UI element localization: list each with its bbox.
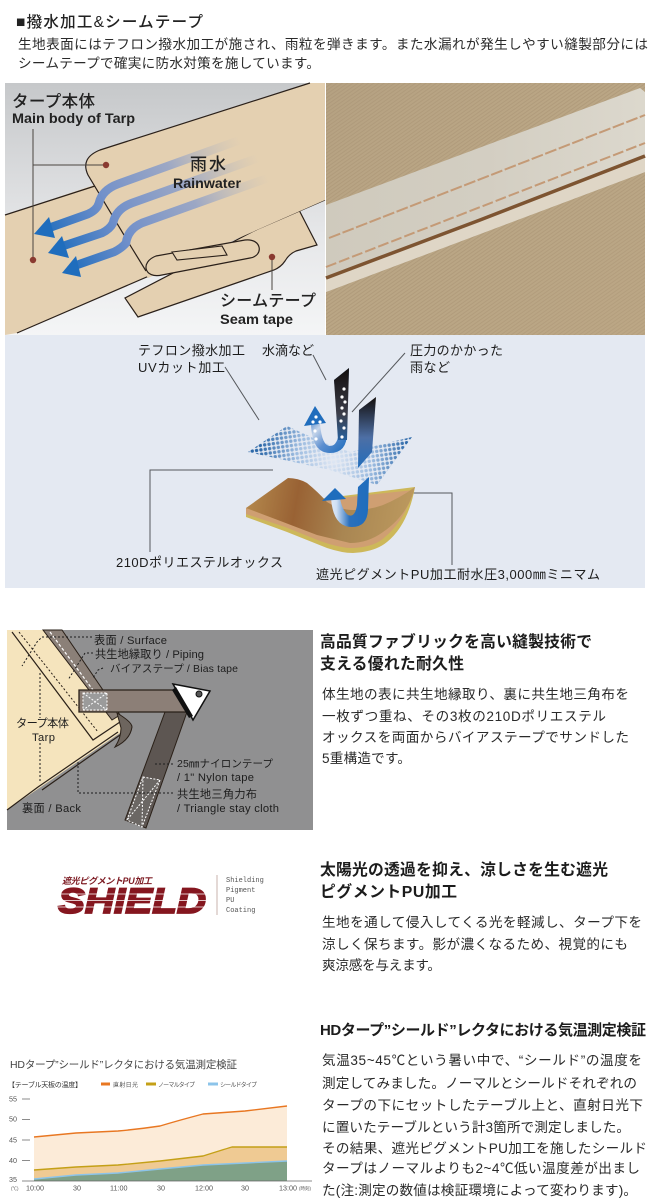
heading: shield pigment: ピグメントPU加工: [320, 882, 457, 901]
text: shield pigment: 涼しく保ちます。影が濃くなるため、視覚的にも: [322, 937, 628, 952]
logo: SHIELD: Shielding: [226, 877, 264, 885]
panel: stitching structure diagram: 共生地縁取り / Piping: [95, 647, 204, 661]
panel: tarp diagram: 雨水: [190, 155, 226, 174]
leader lines: [150, 353, 452, 565]
text: measurement: タープの下にセットしたテーブル上と、直射日光下: [322, 1097, 643, 1113]
panel: fabric layer diagram: 遮光ピグメントPU加工耐水圧3,000㎜ミニマム: [316, 567, 600, 582]
sewn tape band: [326, 88, 645, 292]
intro text: 生地表面にはテフロン撥水加工が施され、雨粒を弾きます。また水漏れが発生しやすい縫製部分には: [18, 37, 648, 52]
text: shield pigment: 爽涼感を与えます。: [322, 957, 441, 973]
chart: temperature measurement: 13:00: [279, 1184, 297, 1192]
chart: temperature measurement: (時刻): [299, 1185, 311, 1192]
text: measurement: 気温35~45℃という暑い中で、“シールド”の温度を: [322, 1053, 642, 1068]
panel: fabric layer diagram: UVカット加工: [138, 360, 225, 375]
panel: stitching structure diagram: タープ本体: [16, 716, 69, 730]
panel: stitching structure diagram: 裏面 / Back: [22, 802, 81, 815]
plot areas: [34, 1106, 287, 1181]
text: measurement: た(注:測定の数値は検証環境によって変わります)。: [322, 1183, 637, 1198]
chart title: HDタープ”シールド”レクタにおける気温測定検証: [10, 1058, 238, 1071]
chart: temperature measurement: 30: [157, 1184, 165, 1192]
text: measurement: その結果、遮光ピグメントPU加工を施したシールド: [322, 1141, 647, 1156]
panel: stitching structure diagram: バイアステープ / Bias tape: [110, 663, 238, 675]
chart: temperature measurement: 35: [9, 1175, 17, 1184]
logo: SHIELD: Pigment: [226, 887, 255, 895]
intro text: シームテープで確実に防水対策を施しています。: [18, 55, 320, 71]
heading: shield pigment: 太陽光の透過を抑え、涼しさを生む遮光: [320, 861, 608, 879]
chart: temperature measurement: 12:00: [195, 1184, 213, 1192]
chart: temperature measurement: 45: [9, 1136, 17, 1144]
droplet arrow: [311, 368, 349, 453]
panel: stitching structure diagram: / 1" Nylon tape: [177, 772, 254, 784]
repellent mesh: [248, 426, 412, 485]
text: durability: 一枚ずつ重ね、その3枚の210Dポリエステル: [322, 709, 606, 724]
labels: テフロン撥水加工: [138, 343, 245, 358]
text: measurement: に置いたテーブルという計3箇所で測定しました。: [322, 1119, 630, 1135]
tarp body: [5, 183, 325, 335]
labels: 表面 / Surface: [94, 634, 167, 647]
text: measurement: 測定してみました。ノーマルとシールドそれぞれの: [322, 1076, 637, 1091]
text: durability: [322, 687, 629, 766]
heading: durability: 高品質ファブリックを高い縫製技術で: [320, 632, 592, 651]
heading: shield pigment: [320, 861, 608, 901]
piping: [43, 630, 120, 720]
panel: stitching structure diagram: 25㎜ナイロンテープ: [177, 758, 274, 770]
slot: [146, 240, 259, 276]
legend: シールドタイプ: [220, 1081, 257, 1089]
heading: measurement: HDタープ”シールド”レクタにおける気温測定検証: [320, 1021, 646, 1039]
triangle stay: [173, 684, 210, 720]
panel: tarp diagram: [5, 83, 325, 335]
chart: temperature measurement: 50: [9, 1114, 17, 1124]
text: shield pigment: 生地を通して侵入してくる光を軽減し、タープ下を: [322, 914, 642, 930]
heading: durability: [320, 632, 592, 673]
cream tarp: [7, 630, 122, 810]
logo: SHIELD: 遮光ピグメントPU加工: [62, 876, 153, 886]
panel: stitching structure diagram: 共生地三角力布: [177, 787, 257, 801]
logo: SHIELD: PU: [226, 897, 234, 905]
text: measurement: [322, 1053, 647, 1198]
text: durability: 体生地の表に共生地縁取り、裏に共生地三角布を: [322, 687, 629, 702]
panel: stitching structure diagram: Tarp: [32, 732, 55, 744]
text: shield pigment: [322, 914, 642, 973]
logo: SHIELD: [54, 875, 264, 921]
chart: temperature measurement: [8, 1058, 312, 1192]
logo: SHIELD: SHIELD: [58, 882, 206, 921]
axes: [22, 1099, 312, 1181]
chart: temperature measurement: 10:00: [26, 1184, 44, 1192]
heading: durability: 支える優れた耐久性: [320, 654, 464, 673]
panel: tarp diagram: Main body of Tarp: [12, 110, 135, 126]
rain arrows: [46, 140, 240, 229]
chart: temperature measurement: 30: [73, 1184, 81, 1192]
title: water repellent and seam tape: ■撥水加工&シームテープ: [16, 13, 203, 31]
fabric layers: [246, 487, 415, 553]
legend: ノーマルタイプ: [158, 1081, 195, 1089]
panel: seam photo: [326, 83, 645, 335]
dotted leaders: [22, 637, 175, 793]
intro text: [18, 37, 648, 71]
panel: stitching structure diagram: / Triangle stay cloth: [177, 803, 279, 815]
panel: fabric layer diagram: 圧力のかかった: [410, 343, 503, 358]
panel: fabric layer diagram: 210Dポリエステルオックス: [116, 555, 283, 570]
chart: temperature measurement: 30: [241, 1184, 249, 1192]
pressure arrow: [358, 397, 376, 468]
chart: temperature measurement: 55: [9, 1094, 17, 1104]
panel: fabric layer diagram: 水滴など: [262, 343, 314, 358]
panel: fabric layer diagram: 雨など: [410, 360, 450, 375]
panel: tarp diagram: Rainwater: [173, 175, 242, 191]
panel: fabric layer diagram: [5, 335, 645, 588]
legend: [8, 1080, 257, 1089]
leader lines: [33, 129, 272, 290]
chart: temperature measurement: 40: [9, 1156, 17, 1165]
labels: タープ本体: [12, 92, 96, 111]
panel: stitching structure diagram: [7, 630, 313, 830]
panel: tarp diagram: Seam tape: [220, 311, 293, 327]
legend: 直射日光: [113, 1081, 138, 1089]
text: durability: 5重構造です。: [322, 751, 411, 766]
chart: temperature measurement: (℃): [11, 1186, 19, 1191]
seam tape under layer: [125, 208, 317, 317]
chart: temperature measurement: 11:00: [110, 1184, 127, 1192]
panel: tarp diagram: シームテープ: [220, 292, 316, 310]
logo: SHIELD: Coating: [226, 907, 255, 915]
horizontal tape: [79, 690, 193, 712]
text: measurement: タープはノーマルよりも2~4℃低い温度差が出まし: [322, 1161, 640, 1176]
legend: 【テーブル天板の温度】: [8, 1080, 82, 1089]
text: durability: オックスを両面からバイアステープでサンドした: [322, 730, 629, 745]
nylon tape: [125, 712, 187, 828]
